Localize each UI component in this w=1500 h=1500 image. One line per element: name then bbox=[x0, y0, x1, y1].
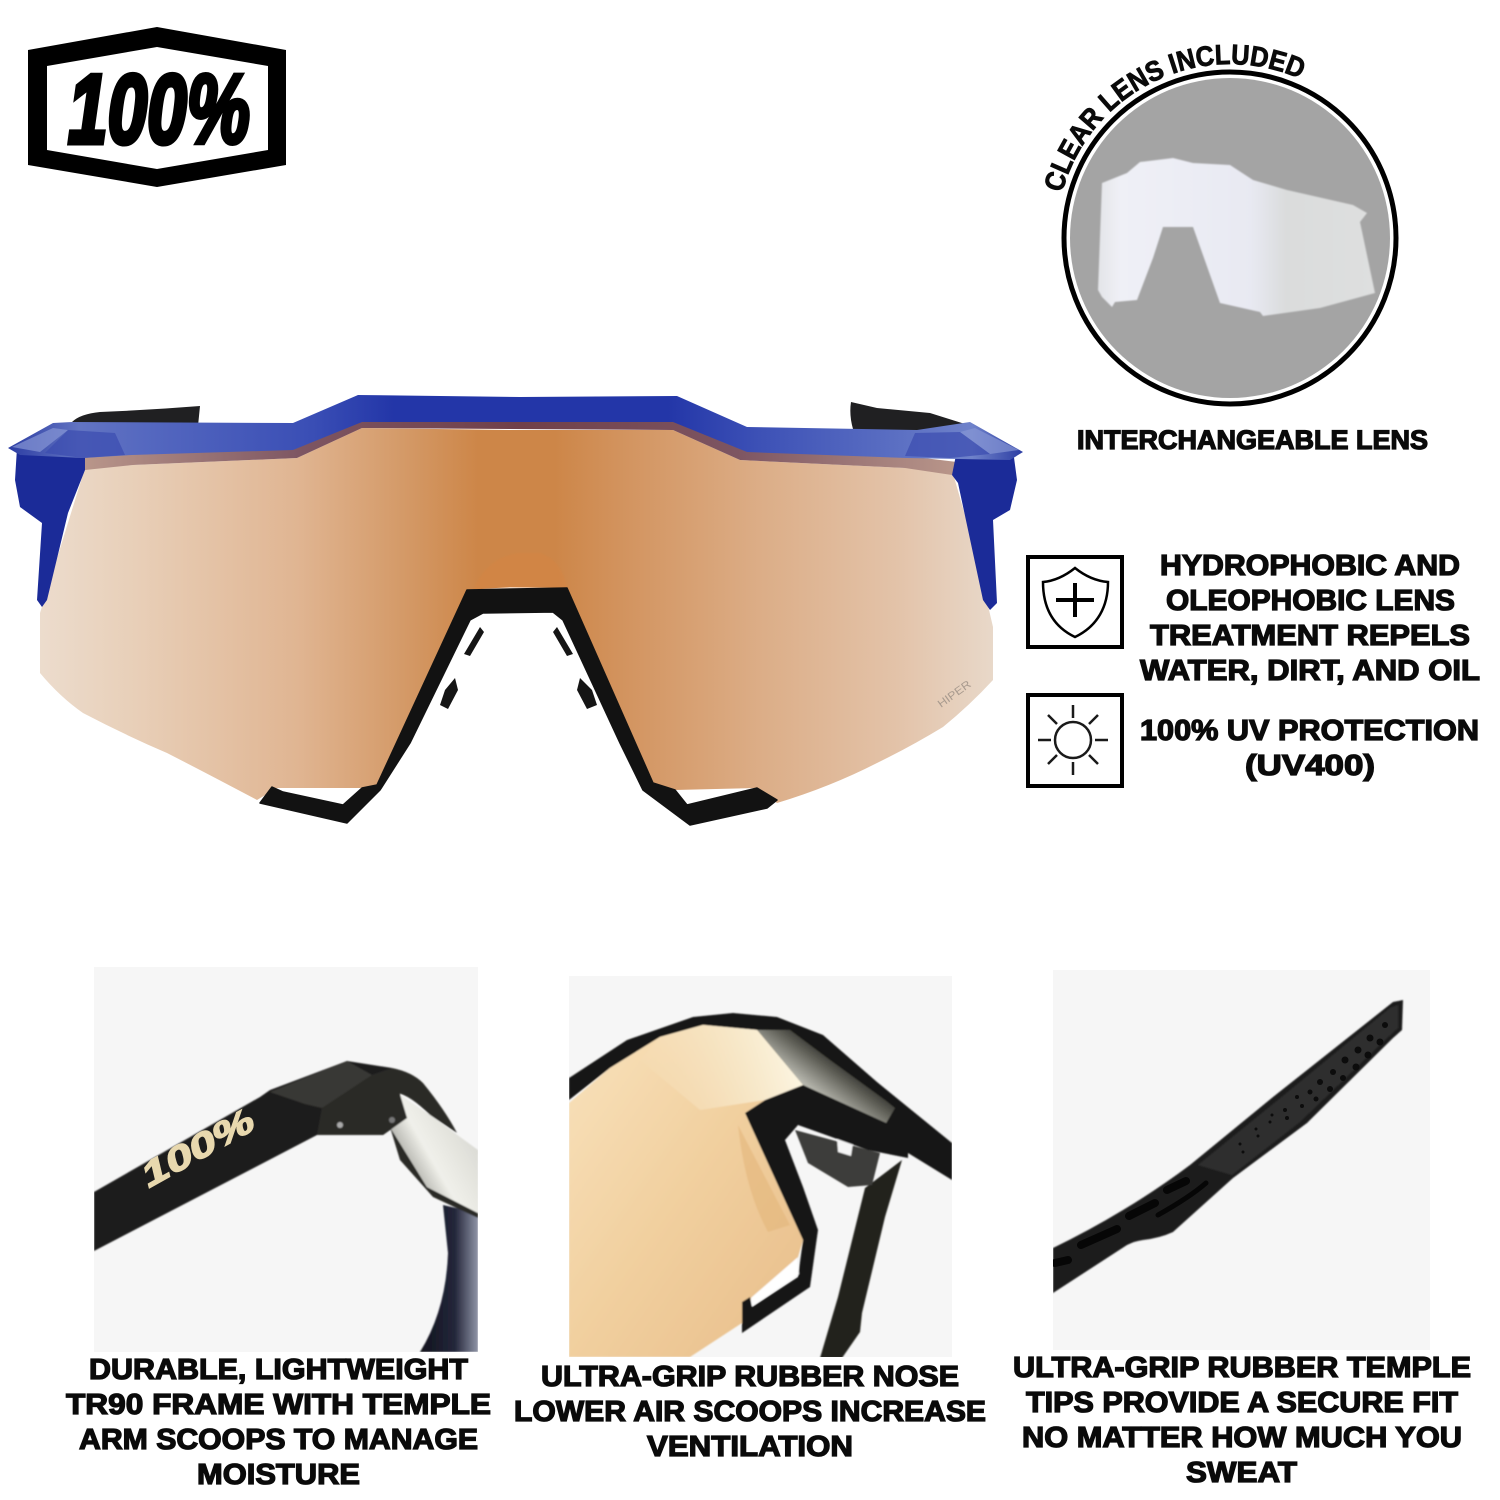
rubber pad bbox=[795, 1130, 880, 1187]
panel: temple tip photo bbox=[1053, 970, 1430, 1350]
panel: temple arm photo bbox=[94, 967, 478, 1352]
nose frame bbox=[260, 588, 777, 825]
gold logo: 100% bbox=[134, 1102, 261, 1195]
lens bbox=[40, 428, 993, 803]
blue brow frame bbox=[8, 395, 1023, 460]
frame rim bbox=[392, 1068, 457, 1133]
caption: temple tips: TIPS PROVIDE A SECURE FIT bbox=[1026, 1387, 1458, 1419]
hydrophobic text: HYDROPHOBIC AND bbox=[1160, 550, 1460, 582]
caption: temple tips: NO MATTER HOW MUCH YOU bbox=[1022, 1422, 1462, 1454]
UV protection text: (UV400) bbox=[1245, 750, 1375, 782]
caption: nose: LOWER AIR SCOOPS INCREASE bbox=[514, 1396, 986, 1428]
temple arm bbox=[820, 1160, 902, 1358]
lens mark: HIPER bbox=[936, 678, 974, 710]
caption: nose bbox=[514, 1361, 986, 1463]
nose pads bbox=[440, 627, 597, 709]
gold lens bbox=[569, 1025, 803, 1357]
logo: 100% badge: 100% bbox=[68, 54, 250, 164]
lens frame bbox=[420, 1205, 478, 1352]
scoops bbox=[1055, 1181, 1206, 1263]
caption: frame bbox=[66, 1354, 491, 1491]
brow facets bbox=[12, 428, 1019, 454]
nose bracket bbox=[742, 1085, 908, 1333]
temple tip bbox=[1053, 1000, 1403, 1293]
clear lens badge bbox=[1045, 44, 1398, 406]
temple bar sheen bbox=[757, 1030, 895, 1125]
right hinge arm bbox=[952, 450, 1017, 610]
hydrophobic text: OLEOPHOBIC LENS bbox=[1166, 585, 1455, 617]
caption: nose: ULTRA-GRIP RUBBER NOSE bbox=[541, 1361, 959, 1393]
lens circle bbox=[1064, 72, 1396, 404]
white lens bar bbox=[390, 1093, 478, 1213]
caption: temple tips bbox=[1013, 1352, 1471, 1489]
textured panel bbox=[1198, 1005, 1398, 1175]
vent slot bbox=[751, 1258, 799, 1306]
temple tips bbox=[72, 406, 200, 430]
icon: sun bbox=[1028, 695, 1122, 786]
UV protection text: 100% UV PROTECTION bbox=[1140, 715, 1479, 747]
left hinge arm bbox=[15, 448, 85, 607]
logo: 100% badge bbox=[28, 27, 286, 187]
hydrophobic text: TREATMENT REPELS bbox=[1150, 620, 1470, 652]
caption: nose: VENTILATION bbox=[647, 1431, 853, 1463]
clear lens shape bbox=[1098, 158, 1375, 316]
curved label: CLEAR LENS INCLUDED bbox=[1045, 44, 1304, 190]
caption: frame: DURABLE, LIGHTWEIGHT bbox=[89, 1354, 468, 1386]
caption: interchangeable lens: INTERCHANGEABLE LENS bbox=[1077, 425, 1428, 455]
panel: nose photo bbox=[569, 976, 952, 1358]
temple arm bbox=[94, 1061, 407, 1251]
bridge reflection bbox=[473, 553, 567, 590]
pad vent bbox=[837, 1138, 853, 1156]
icon: shield bbox=[1028, 557, 1122, 647]
caption: temple tips: SWEAT bbox=[1186, 1457, 1297, 1489]
rim bbox=[569, 1013, 952, 1180]
caption: frame: ARM SCOOPS TO MANAGE bbox=[79, 1424, 478, 1456]
hex and dot texture bbox=[1238, 1022, 1388, 1154]
hinge plate bbox=[270, 1061, 372, 1108]
hinge pins bbox=[337, 1122, 343, 1128]
caption: temple tips: ULTRA-GRIP RUBBER TEMPLE bbox=[1013, 1352, 1471, 1384]
caption: frame: MOISTURE bbox=[197, 1459, 360, 1491]
hydrophobic text: WATER, DIRT, AND OIL bbox=[1140, 655, 1480, 687]
UV protection text bbox=[1140, 715, 1479, 782]
main sunglasses bbox=[8, 395, 1023, 825]
hydrophobic text bbox=[1140, 550, 1480, 687]
caption: frame: TR90 FRAME WITH TEMPLE bbox=[66, 1389, 491, 1421]
lens top band bbox=[83, 420, 957, 475]
